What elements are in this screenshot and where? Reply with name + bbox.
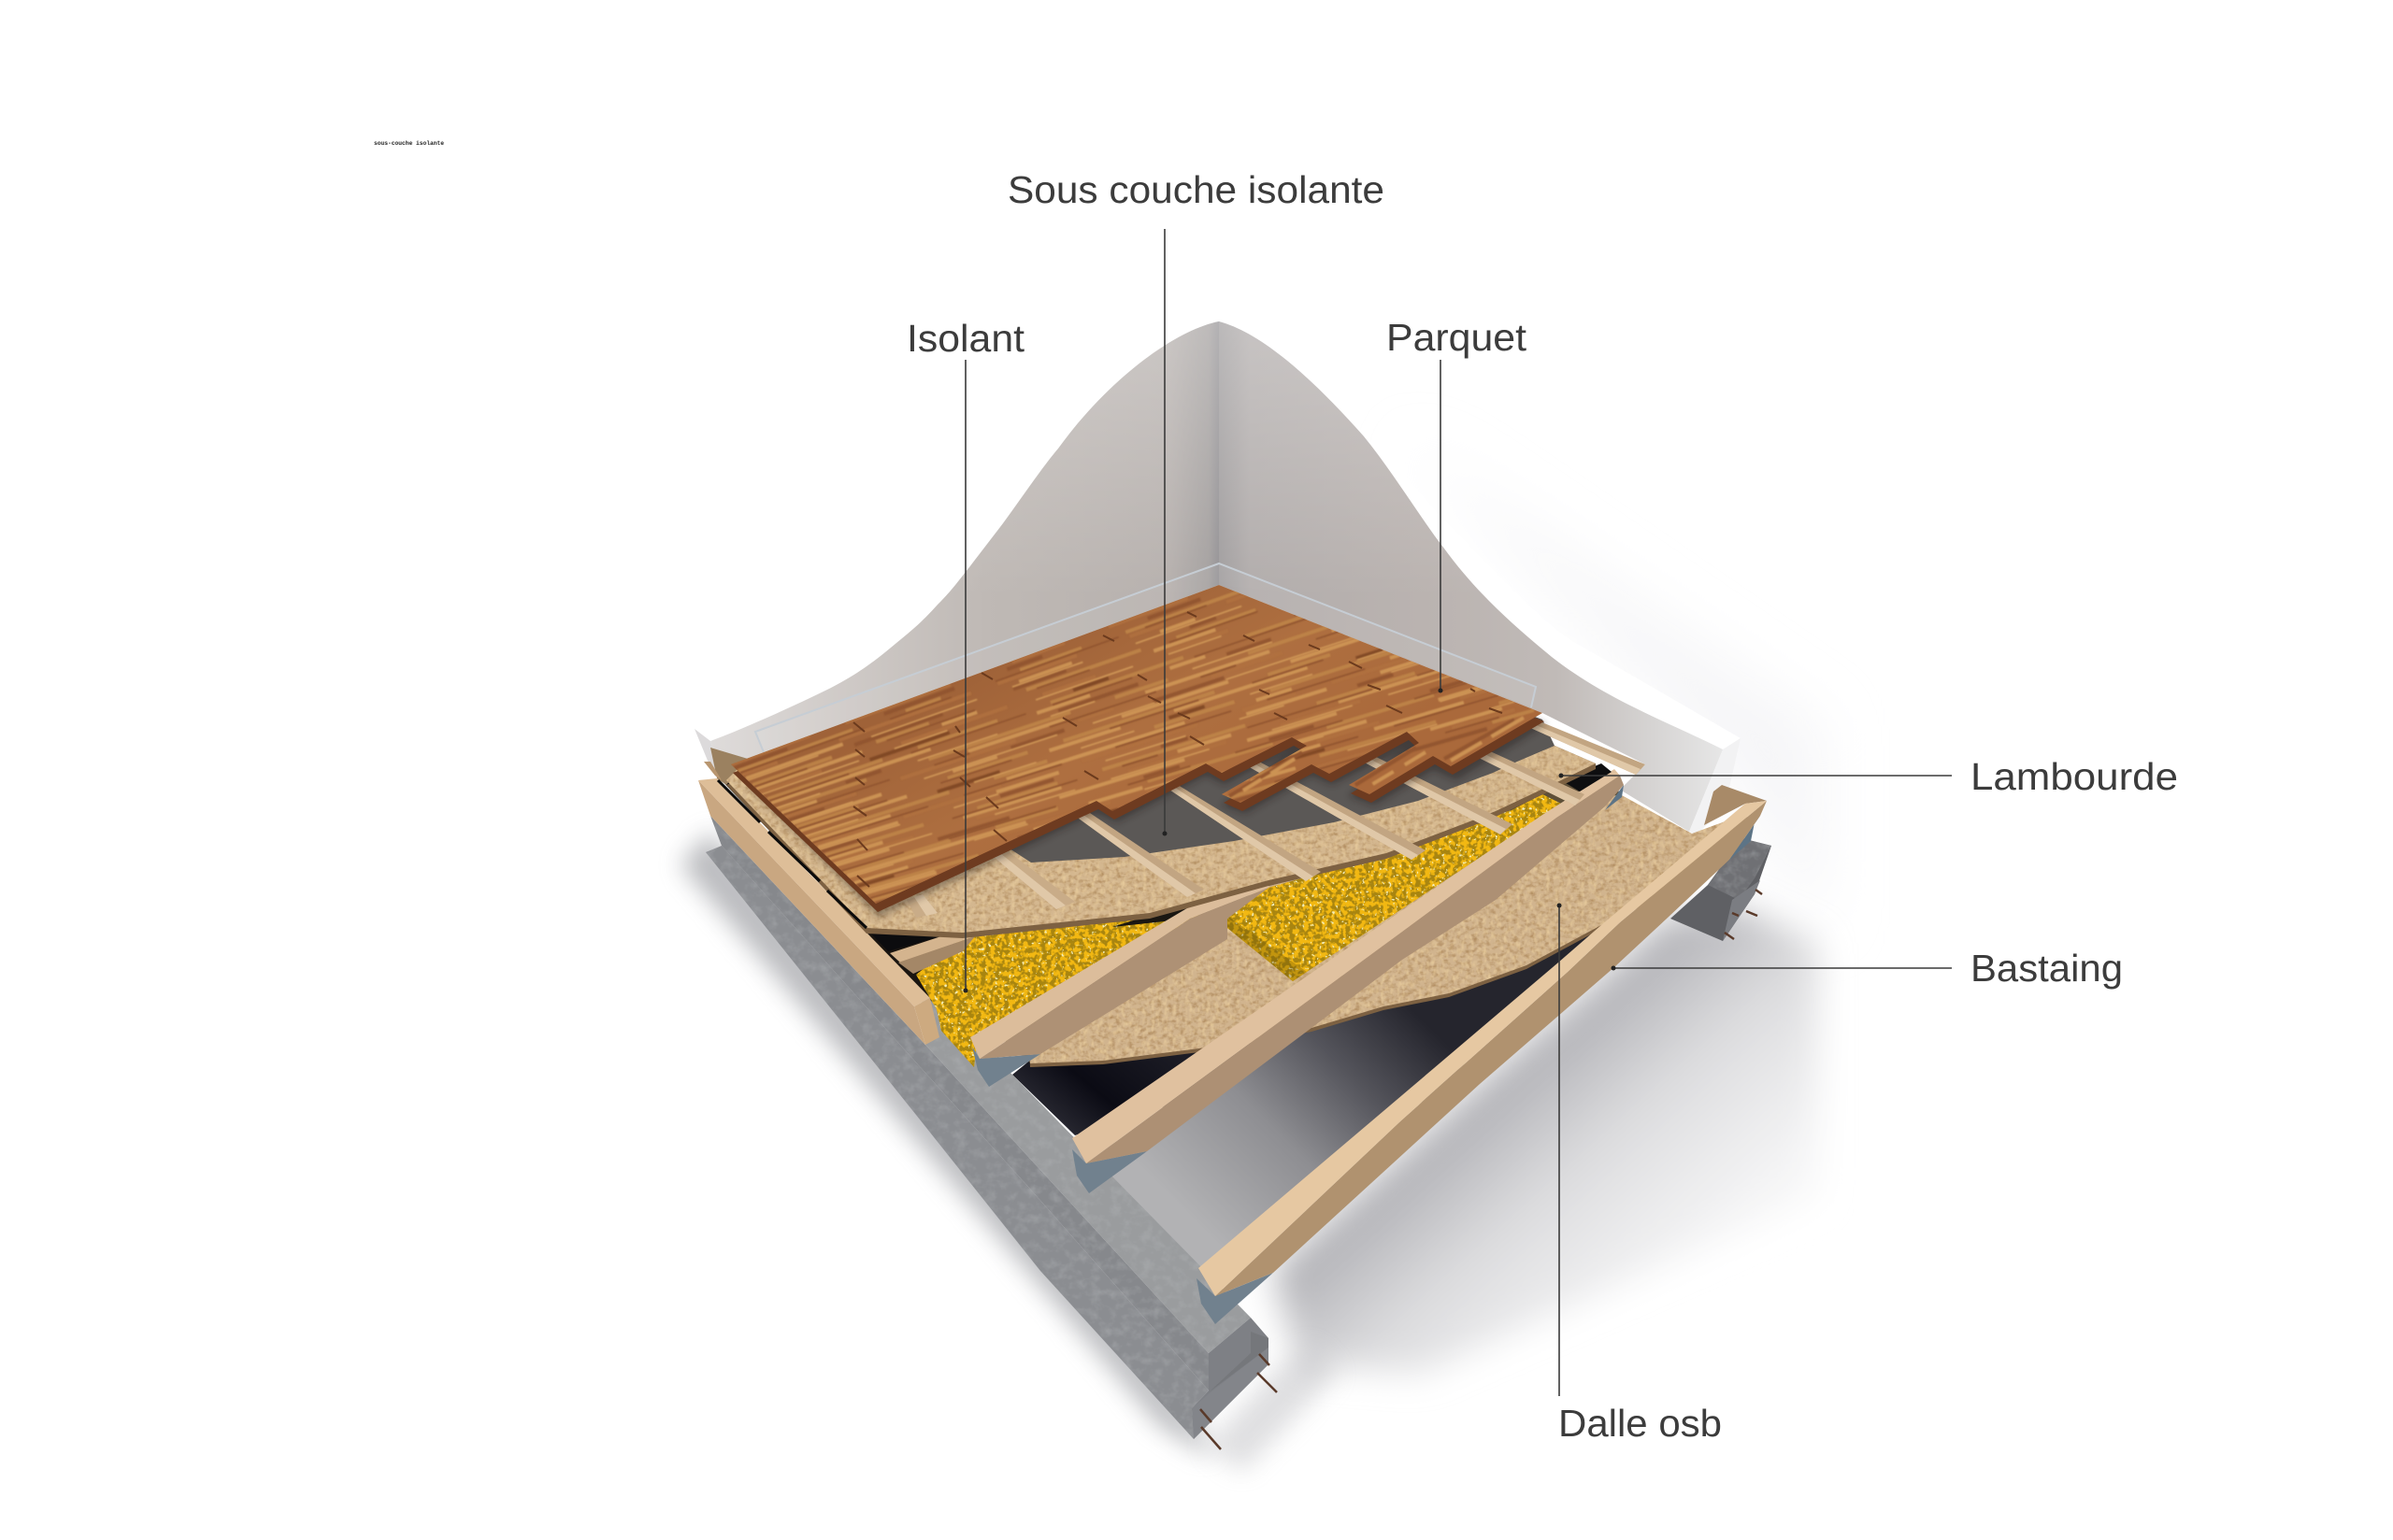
- plank edge thickness: [733, 593, 1544, 912]
- parquet: [731, 585, 1547, 918]
- label: Lambourde: Lambourde: [1970, 755, 2178, 798]
- label: Isolant: [907, 317, 1025, 992]
- lambourde battens: [907, 721, 1645, 918]
- joist 3: [1198, 801, 1767, 1296]
- joist 1: [970, 874, 1268, 1059]
- plank strips: [731, 585, 1542, 904]
- under-floor backing: [710, 748, 1620, 1065]
- plank top surface: [731, 585, 1542, 904]
- label: Dalle osb: Dalle osb: [1558, 1402, 1722, 1445]
- joist 2: [1072, 769, 1624, 1163]
- bastaing joists and brackets: [970, 769, 1767, 1324]
- label: Sous couche isolante: [1008, 168, 1384, 835]
- sous couche isolante: grey underlayer: [935, 598, 1555, 863]
- label: Bastaing: Bastaing: [1970, 947, 2123, 990]
- metal brackets: [972, 785, 1760, 1324]
- rear rim joist: [1704, 785, 1767, 825]
- small caption: sous-couche isolante: [374, 140, 444, 147]
- left wall: [710, 321, 1219, 780]
- label: Parquet: Parquet: [1386, 316, 1527, 359]
- label: Bastaing: [1612, 947, 2123, 990]
- rear concrete footing: [1670, 838, 1771, 941]
- plank end joints: [853, 612, 1502, 887]
- dalle osb lower panel: [1028, 794, 1748, 1067]
- isolant: insulation batts: [916, 794, 1561, 1067]
- right wall: [1219, 321, 1723, 832]
- skirting boards: [755, 563, 1536, 752]
- wall end faces: [695, 729, 1741, 834]
- cross beam and black gaps: [869, 763, 1612, 974]
- label: Parquet: [1386, 316, 1527, 693]
- label: Dalle osb: [1557, 903, 1722, 1445]
- parquet shadow: [748, 598, 1547, 918]
- label: Sous couche isolante: Sous couche isolante: [1008, 168, 1384, 211]
- cavity under the floor: [1012, 920, 1608, 1271]
- front rim joist: [698, 762, 939, 1045]
- dalle osb upper panel: [718, 598, 1596, 938]
- ground shadows: [681, 439, 1823, 1472]
- label: Isolant: Isolant: [907, 317, 1025, 360]
- wall white edge band: [1364, 436, 1741, 749]
- label: Lambourde: [1559, 755, 2178, 798]
- concrete beam: [706, 816, 1277, 1449]
